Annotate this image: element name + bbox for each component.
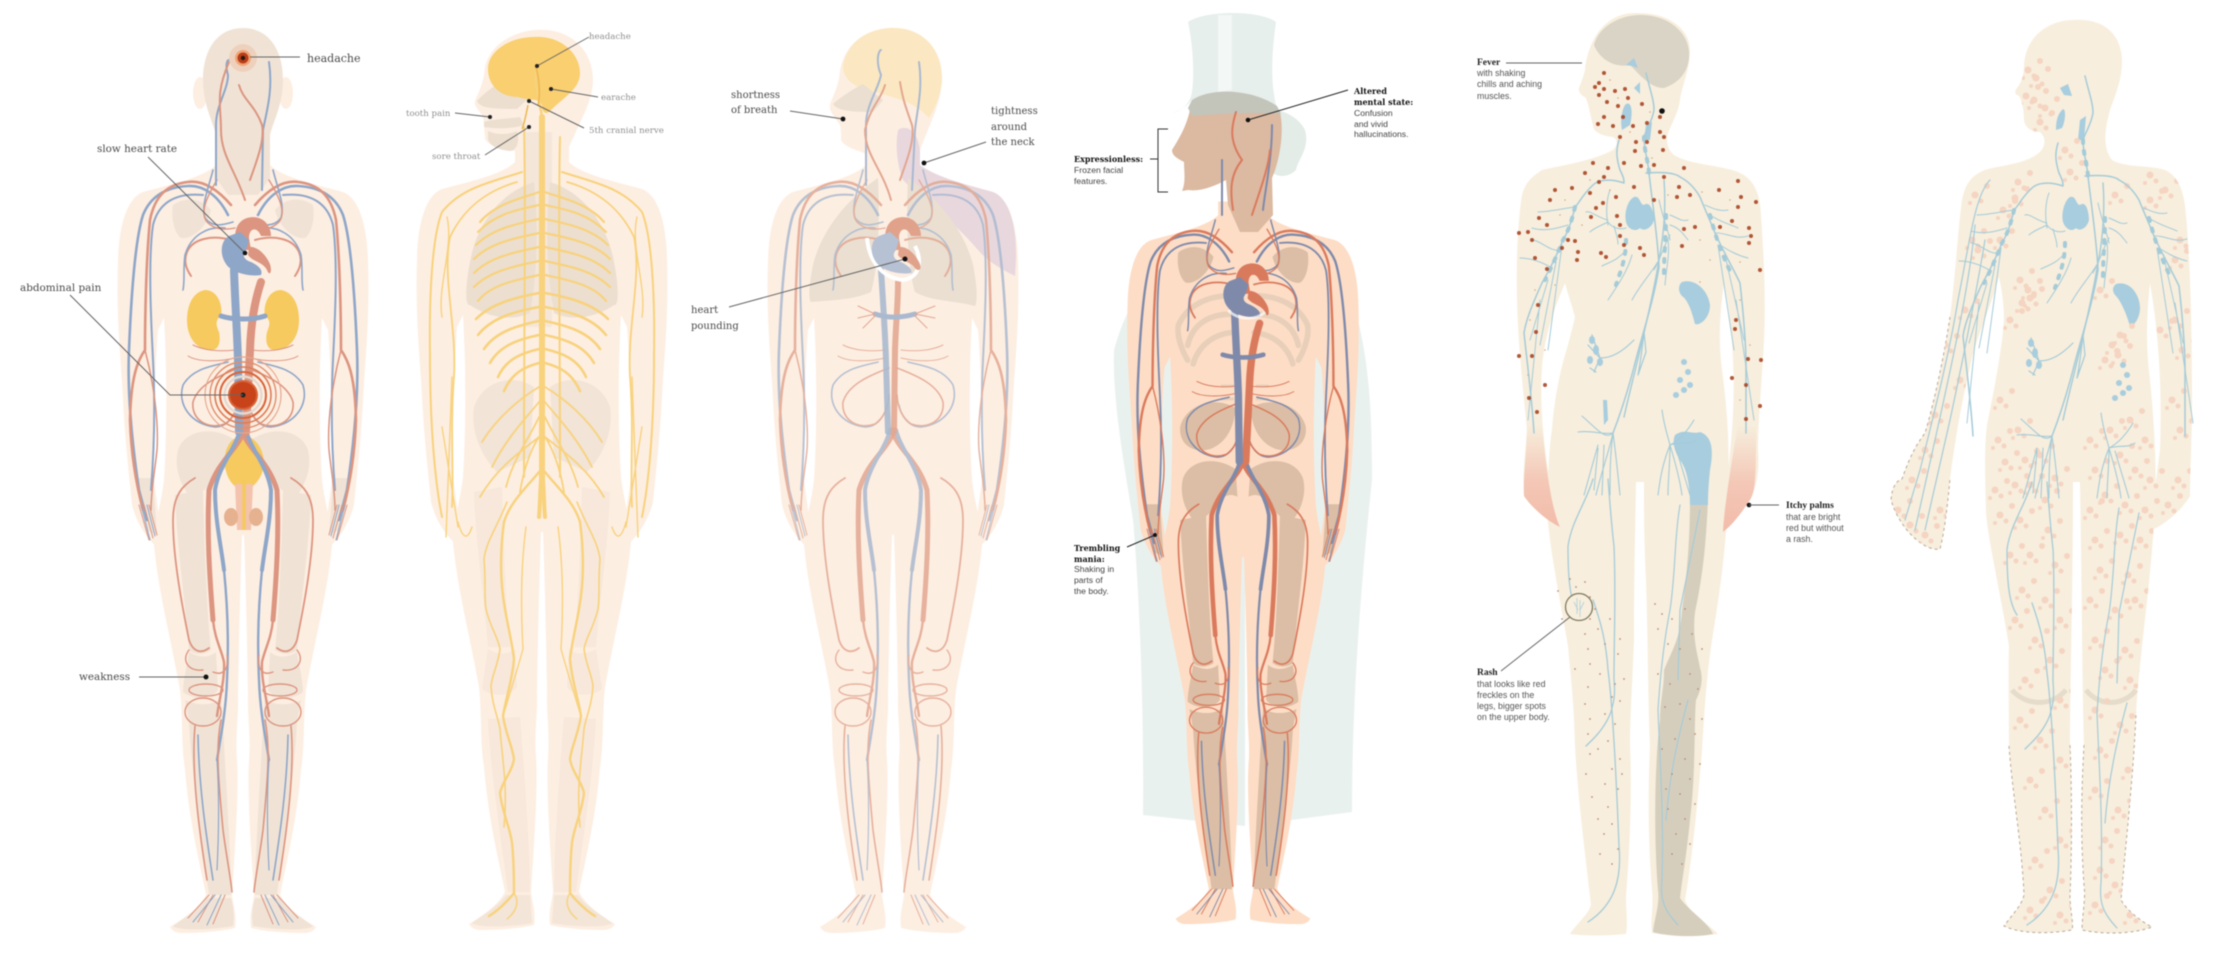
label: shortness of breath [731, 90, 845, 121]
label: altered mental state: mental state: [1354, 97, 1413, 107]
brain, pale yellow [843, 28, 942, 118]
lungs [466, 182, 618, 318]
label: shortness of breath: of breath [731, 105, 778, 116]
label: 5th cranial nerve: 5th cranial nerve [589, 126, 664, 136]
skeleton shadow [135, 200, 351, 929]
skull and neck [203, 28, 283, 195]
neck vessels [1222, 112, 1272, 215]
label: abdominal pain: abdominal pain [20, 282, 102, 294]
purple shoulder tension area [897, 128, 1016, 276]
label: expressionless: Expressionless: [1074, 154, 1143, 164]
label: headache (nervous): headache [589, 32, 631, 42]
body silhouette [1517, 13, 1765, 936]
label: earache [549, 87, 636, 103]
circulatory vessels [129, 60, 357, 925]
label: tooth pain: tooth pain [406, 109, 451, 119]
figure: lymphatic system with typhoid rash [1517, 13, 1765, 936]
hat [1167, 13, 1282, 115]
label: altered mental state [1246, 86, 1413, 139]
hair [1270, 110, 1306, 176]
label: rash: that looks like red [1477, 679, 1546, 689]
lymph vessels [1520, 73, 1754, 925]
pain target: headache rings [229, 44, 257, 72]
label: expressionless: Frozen facial [1074, 165, 1123, 175]
label: rash: freckles on the [1477, 690, 1534, 700]
label: rash [1477, 617, 1570, 722]
label: slow heart rate [97, 143, 247, 255]
head profile [1172, 98, 1282, 232]
dashed outline on limbs [1891, 317, 2152, 933]
label: tightness around the neck: around [991, 122, 1028, 133]
label: headache: headache [307, 52, 361, 65]
label: tightness around the neck [922, 106, 1038, 165]
label: earache: earache [601, 93, 636, 103]
facial bones [833, 84, 883, 112]
body [1127, 201, 1359, 924]
heart with white pounding ring [867, 217, 921, 280]
body silhouette [417, 30, 667, 930]
facial bones [477, 81, 530, 151]
thymus and spleen [2056, 84, 2140, 326]
label: tooth pain [406, 109, 492, 119]
label: heart pounding [691, 256, 908, 332]
label: slow heart rate: slow heart rate [97, 143, 177, 155]
ribs [1178, 296, 1308, 364]
faint knee band [2012, 690, 2136, 702]
brain [1594, 15, 1689, 88]
label: altered mental state: hallucinations. [1354, 129, 1408, 139]
lymph vessels [1959, 76, 2193, 928]
pain target: abdominal rings [205, 357, 281, 433]
label: trembling mania: Shaking in [1074, 564, 1114, 574]
label: sore throat [432, 125, 531, 162]
label: fever: chills and aching [1477, 79, 1542, 89]
genitals [224, 480, 263, 530]
label: itchy palms: Itchy palms [1786, 501, 1834, 511]
rash: large upper-body spots [1519, 73, 1761, 419]
label: tightness around the neck: tightness [991, 106, 1038, 117]
brain [488, 37, 580, 113]
coat [1114, 300, 1372, 826]
label: trembling mania: the body. [1074, 586, 1109, 596]
figure: man in top hat and coat [1114, 13, 1372, 924]
label: fever: Fever [1477, 58, 1501, 68]
label: weakness [79, 671, 208, 683]
figure: nervous system [417, 30, 667, 930]
label: itchy palms [1747, 501, 1844, 544]
label: shortness of breath: shortness [731, 90, 780, 101]
label: fever: with shaking [1476, 68, 1526, 78]
pelvis wings [1180, 402, 1306, 450]
label: expressionless [1074, 129, 1168, 192]
label: heart pounding: heart [691, 305, 718, 316]
label: rash: legs, bigger spots [1477, 701, 1547, 711]
spine and pelvis shadow [472, 132, 612, 926]
label: fever: muscles. [1477, 91, 1512, 101]
thymus, spleen and bone marrow in blue [1603, 58, 1712, 505]
label: fever [1476, 58, 1582, 101]
circulatory vessels [779, 50, 1007, 925]
label: altered mental state: Confusion [1354, 108, 1393, 118]
label: expressionless: features. [1074, 176, 1107, 186]
label: sore throat: sore throat [432, 152, 481, 162]
body silhouette [1891, 20, 2192, 933]
body silhouette [768, 28, 1018, 933]
kidneys [187, 290, 299, 350]
label: tightness around the neck: the neck [991, 137, 1036, 148]
label: rash: on the upper body. [1477, 712, 1550, 722]
pink blotches [1893, 61, 2194, 923]
leg bone [1653, 500, 1713, 936]
red palms [1524, 425, 1756, 532]
label: itchy palms: that are bright [1786, 512, 1841, 522]
label: rash: Rash [1477, 668, 1498, 678]
label: altered mental state: Altered [1353, 86, 1387, 96]
rash circle detail [1566, 594, 1592, 620]
label: itchy palms: a rash. [1786, 534, 1813, 544]
label: trembling mania: parts of [1074, 575, 1103, 585]
label: altered mental state: and vivid [1354, 119, 1388, 129]
label: 5th cranial nerve [527, 99, 664, 136]
rash: fine freckles on legs [1558, 579, 1702, 864]
label: headache [250, 52, 361, 65]
nerves [430, 67, 654, 919]
body silhouette [118, 77, 368, 933]
label: heart pounding: pounding [691, 321, 739, 332]
figure: lymphatic system with full-body blotches [1891, 20, 2194, 933]
label: trembling mania: mania: [1074, 554, 1105, 564]
lymph nodes by pelvis [2026, 339, 2132, 401]
label: trembling mania [1074, 533, 1157, 596]
lymph nodes by pelvis [1587, 336, 1693, 398]
label: abdominal pain [20, 282, 243, 395]
lymph vessels of the spread arm [1905, 180, 1990, 530]
figure: circulatory system with headache and abdominal pain [118, 28, 368, 933]
label: trembling mania: Trembling [1074, 543, 1121, 553]
label: weakness: weakness [79, 671, 130, 683]
label: itchy palms: red but without [1786, 523, 1844, 533]
label: headache (nervous) [535, 32, 631, 68]
bladder and pelvic organ [225, 436, 264, 490]
lungs [809, 178, 977, 306]
figure: circulatory system with chest symptoms [768, 28, 1018, 933]
